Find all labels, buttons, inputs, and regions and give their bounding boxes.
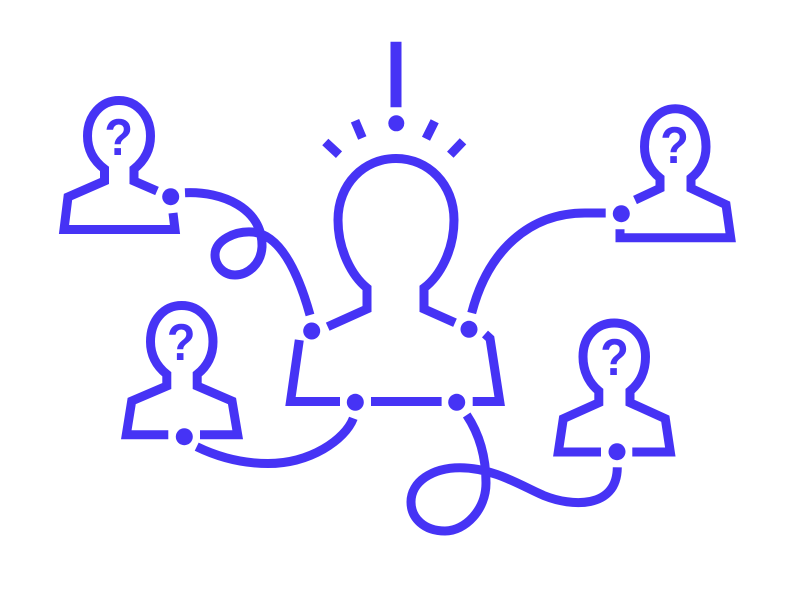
connector top left to center — [185, 193, 310, 315]
central person — [290, 158, 500, 411]
connector lower right to center — [411, 415, 617, 531]
person lower left — [126, 306, 238, 445]
person lower right: ? — [600, 329, 629, 387]
person lower left: ? — [167, 314, 195, 372]
exclamation mark and rays — [325, 42, 463, 155]
person top right: ? — [660, 117, 689, 175]
person lower right — [558, 323, 670, 460]
connector lower left to center — [197, 418, 353, 464]
connector top right to center — [472, 213, 606, 313]
person top left: ? — [104, 109, 133, 167]
person top left — [64, 100, 179, 230]
person top right — [613, 109, 731, 238]
